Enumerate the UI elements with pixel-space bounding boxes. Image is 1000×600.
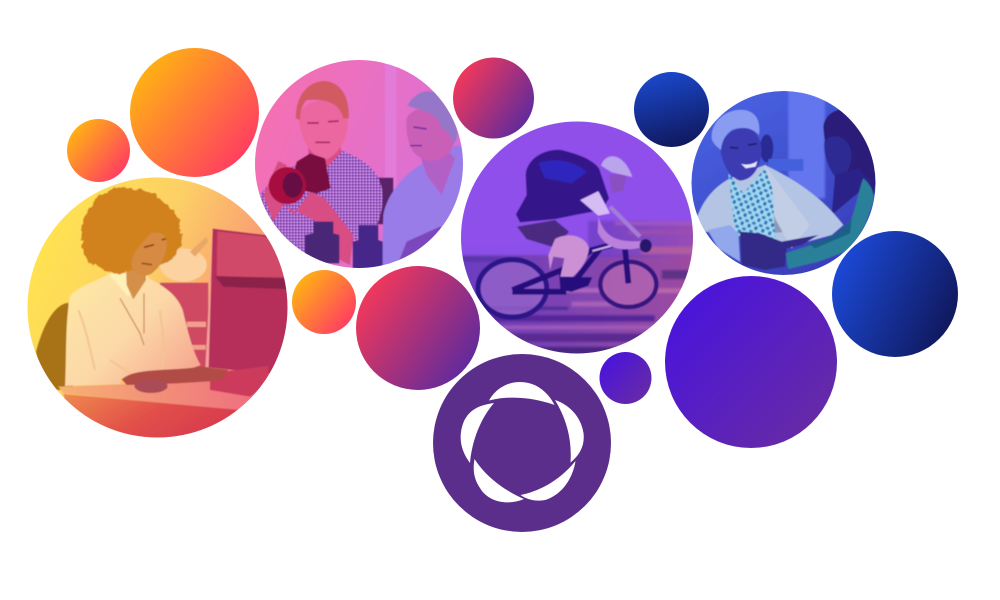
photo: cyclist	[461, 122, 693, 354]
logo: purple circle with petal ring	[433, 354, 611, 532]
hands	[740, 232, 818, 270]
medium magenta circle centre	[356, 266, 480, 390]
blue circle top right	[634, 72, 709, 147]
left woman jacket	[697, 165, 843, 245]
necklace	[120, 293, 144, 345]
green sleeve	[786, 178, 874, 269]
small violet circle	[600, 352, 652, 404]
shorts	[517, 220, 569, 248]
left man neck and face	[308, 147, 342, 168]
right woman hair, neck and back	[823, 109, 879, 197]
desk	[58, 381, 255, 410]
left man hair	[296, 81, 349, 120]
neck	[126, 265, 146, 299]
shoe	[561, 277, 592, 292]
lenses	[305, 222, 339, 263]
rear wheel	[478, 260, 547, 317]
collage of circles	[28, 48, 958, 532]
left man shirt	[260, 150, 383, 255]
bike frame	[512, 243, 628, 292]
plant and shelf	[160, 237, 208, 369]
arm	[598, 217, 643, 249]
small orange circle centre	[292, 270, 356, 334]
right man shirt	[382, 144, 463, 266]
logo petals	[461, 382, 584, 502]
camera	[290, 153, 331, 193]
silver hair	[712, 110, 759, 150]
hair	[82, 188, 182, 274]
photo: two men with camera	[255, 60, 463, 268]
leg	[548, 235, 589, 278]
small orange circle	[67, 119, 130, 182]
head and helmet	[609, 174, 627, 193]
glove	[640, 239, 652, 252]
scarf	[728, 168, 776, 252]
backpack and vest	[516, 150, 609, 222]
forearm	[263, 161, 353, 265]
sleeve	[580, 191, 610, 216]
front wheel	[600, 262, 656, 307]
right man neck	[420, 150, 455, 195]
background person	[760, 134, 773, 162]
blue navy circle right	[832, 231, 958, 357]
large violet circle	[665, 276, 837, 448]
right man hair	[407, 91, 458, 143]
dark chair	[377, 178, 393, 224]
ground with motion streaks	[462, 220, 693, 354]
mouse	[134, 379, 168, 393]
photo: two women talking	[692, 91, 876, 275]
medium magenta circle top	[453, 58, 534, 138]
large orange circle	[130, 48, 259, 177]
right man head	[406, 107, 455, 161]
monitor	[205, 228, 293, 377]
face	[720, 128, 762, 181]
cup	[708, 225, 740, 262]
photo: woman at desk	[28, 178, 288, 438]
right man crossed arms	[399, 226, 442, 260]
shirt	[65, 274, 201, 386]
face	[132, 233, 167, 275]
arm	[122, 367, 228, 385]
chair	[36, 303, 73, 390]
